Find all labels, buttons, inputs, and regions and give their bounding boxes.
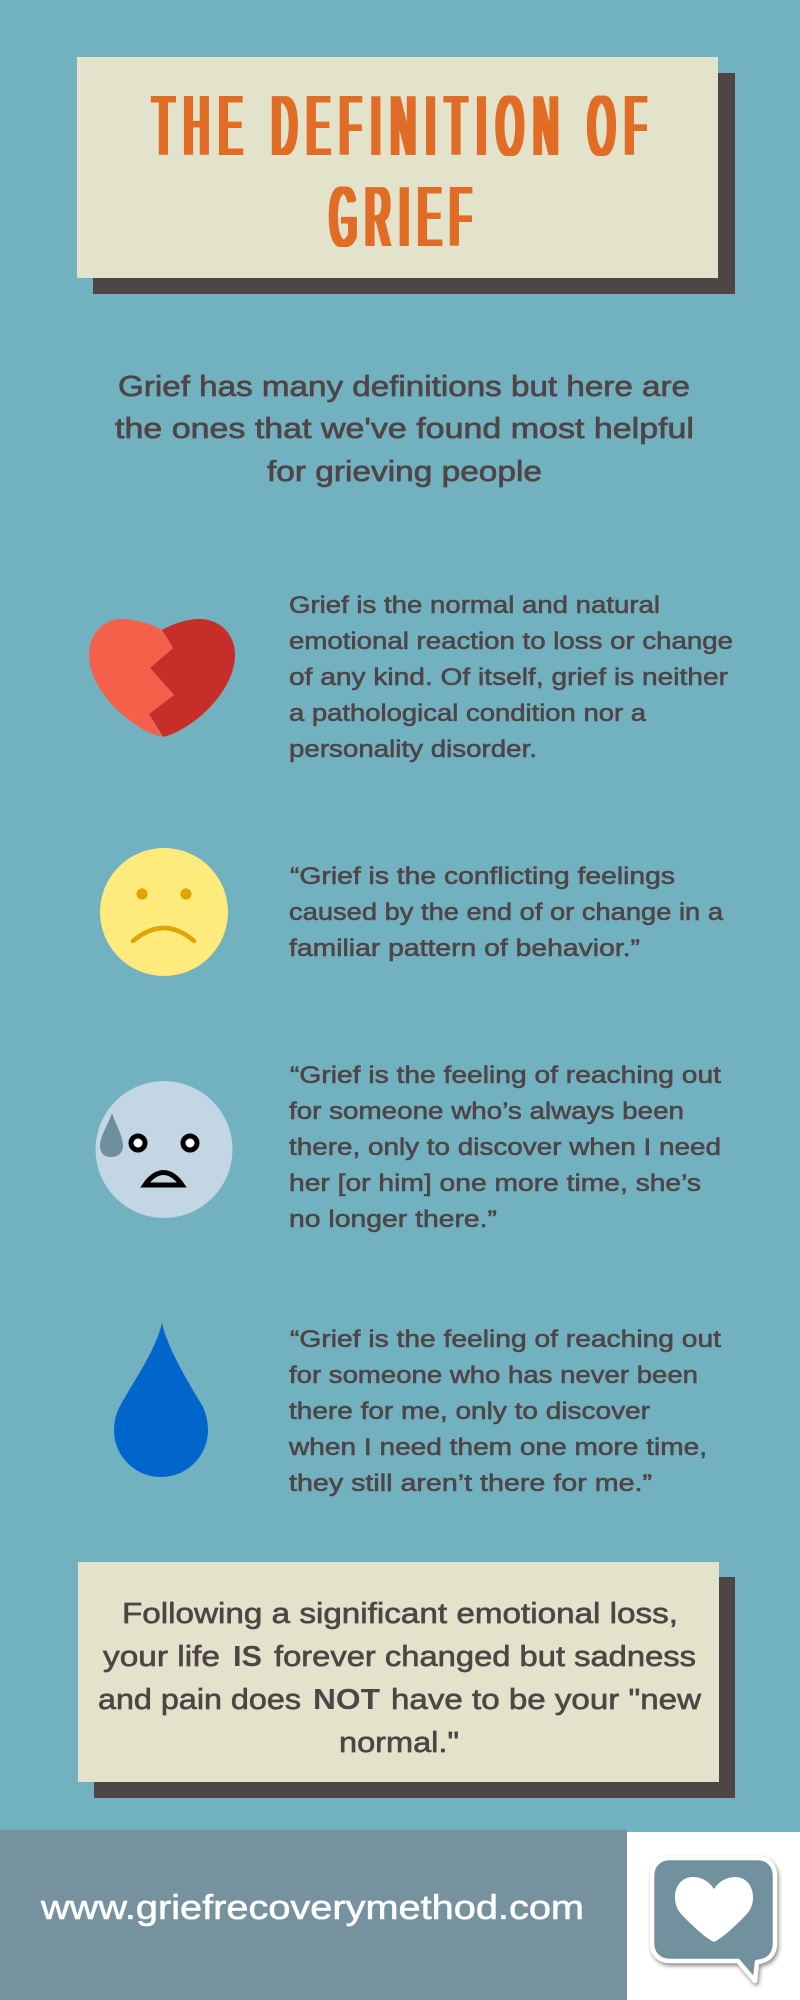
closing text: forever changed but sadness — [274, 1641, 696, 1673]
text: definition 2: “Grief is the conflicting feelings — [290, 863, 675, 890]
text: definition 1: a pathological condition nor a — [289, 700, 646, 727]
text: definition 3: for someone who’s always been — [289, 1098, 684, 1125]
title — [153, 78, 646, 264]
closing text: NOT — [313, 1684, 380, 1716]
text: definition 4: when I need them one more time, — [288, 1434, 707, 1461]
icon: speech bubble heart logo — [652, 1858, 775, 1981]
text: definition 1: Grief is the normal and natural — [289, 592, 660, 619]
text: definition 2 — [289, 863, 723, 962]
title box — [77, 57, 718, 278]
text: definition 4 — [288, 1326, 721, 1497]
intro text: for grieving people — [267, 456, 542, 488]
title: THE DEFINITION OF — [153, 78, 646, 173]
title: GRIEF — [330, 169, 471, 264]
text: definition 2: familiar pattern of behavior.” — [289, 935, 640, 962]
closing text: your life — [103, 1641, 220, 1673]
intro text — [115, 371, 694, 488]
panel: title — [77, 57, 735, 294]
closing text: have to be your "new — [391, 1684, 702, 1716]
text: definition 4: for someone who has never been — [289, 1362, 698, 1389]
text: definition 1: of any kind. Of itself, grief is neither — [289, 664, 728, 691]
closing text: and pain does — [98, 1684, 301, 1716]
text: definition 3: no longer there.” — [289, 1206, 497, 1233]
logo panel — [627, 1832, 800, 2000]
intro text: the ones that we've found most helpful — [115, 413, 694, 445]
closing text: Following a significant emotional loss, — [122, 1598, 678, 1630]
icon: broken heart — [89, 619, 235, 737]
closing text: IS — [233, 1641, 262, 1673]
title box shadow — [93, 73, 735, 294]
text: definition 3 — [289, 1062, 721, 1233]
text: definition 3: there, only to discover when I need — [289, 1134, 721, 1161]
icon: crying blue face — [96, 1081, 232, 1218]
footer bar — [0, 1830, 627, 2000]
closing text: normal." — [339, 1727, 459, 1759]
text: definition 1: personality disorder. — [289, 736, 537, 763]
text: definition 4: there for me, only to discover — [289, 1398, 650, 1425]
footer url: www.griefrecoverymethod.com — [40, 1889, 584, 1927]
closing box — [78, 1562, 719, 1782]
text: definition 4: “Grief is the feeling of reaching out — [290, 1326, 721, 1353]
icon: blue water drop — [114, 1323, 208, 1477]
text: definition 1: emotional reaction to loss or change — [289, 628, 733, 655]
closing box shadow — [94, 1577, 735, 1798]
text: definition 3: “Grief is the feeling of reaching out — [290, 1062, 721, 1089]
panel: closing statement — [78, 1562, 735, 1798]
text: definition 4: they still aren’t there for me.” — [289, 1470, 652, 1497]
text: definition 1 — [289, 592, 733, 763]
text: definition 3: her [or him] one more time, she’s — [289, 1170, 701, 1197]
text: definition 2: caused by the end of or change in a — [289, 899, 723, 926]
icon: sad yellow face — [100, 848, 228, 976]
closing text — [98, 1598, 702, 1759]
intro text: Grief has many definitions but here are — [118, 371, 690, 403]
